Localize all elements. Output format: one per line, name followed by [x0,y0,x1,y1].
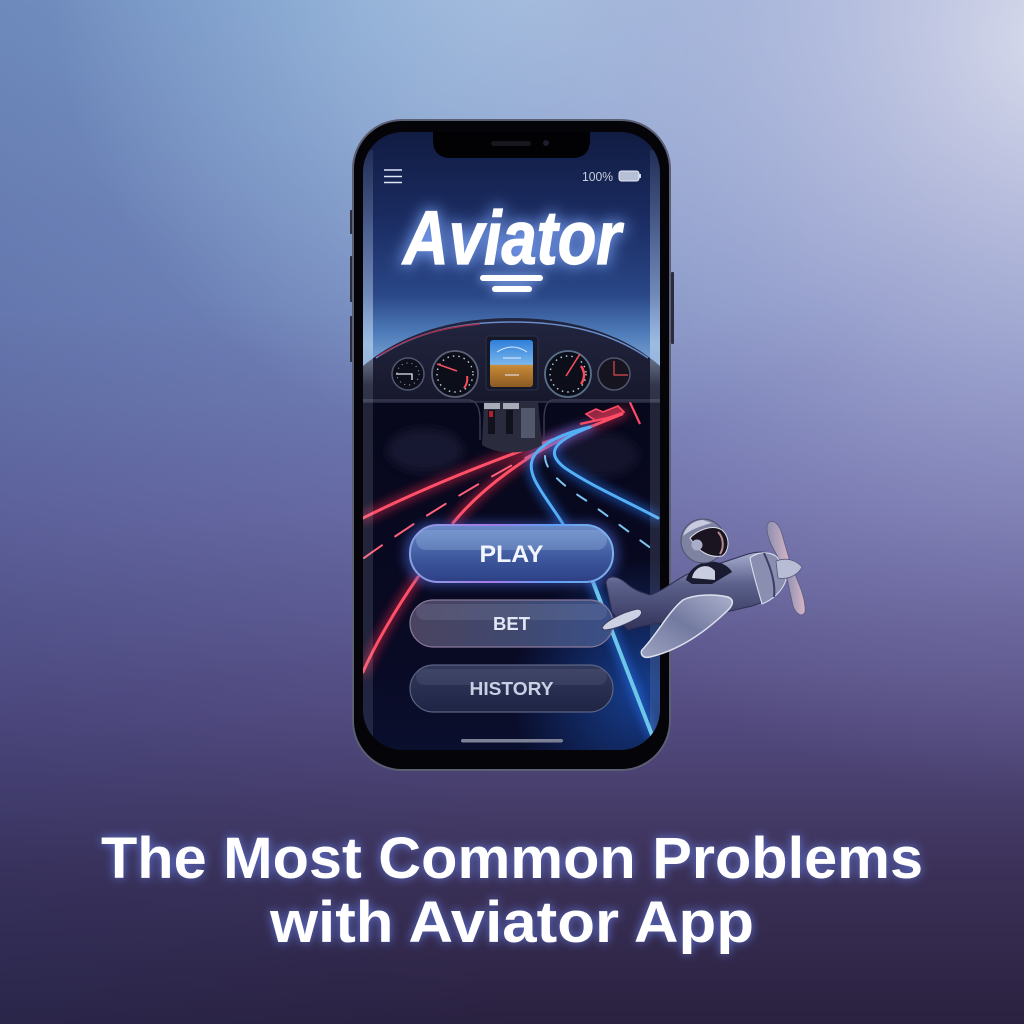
gauge far left [392,358,424,390]
PLAY button: PLAY [480,541,544,568]
gauge far right [598,358,630,390]
title: with Aviator App [269,890,754,955]
attitude indicator display [486,336,538,390]
throttle levers [482,402,542,452]
phone screen [363,132,660,752]
battery status [582,170,641,184]
road: blue neon lines [531,427,660,735]
phone body [352,119,671,771]
title: with Aviator App [269,890,754,955]
menu icon [384,170,402,182]
BET button: BET [493,614,530,634]
smartphone [350,119,674,771]
screen lower road background [363,370,660,752]
Aviator logo: Aviator [401,196,625,281]
logo underline bars [480,275,543,292]
airplane with pilot [602,519,805,657]
HISTORY button [410,665,613,712]
main wing [641,595,732,657]
gauge right [545,351,591,397]
side buttons [350,210,674,362]
tail plane [602,609,642,630]
pilot body in cockpit [686,562,732,584]
BET button [410,600,613,647]
Aviator logo: Aviator [401,196,625,281]
screen sky [363,132,660,372]
propeller [767,521,805,615]
notch [433,132,590,158]
gauge left [432,351,478,397]
PLAY button [404,522,619,586]
battery status: 100% [582,170,613,184]
title: The Most Common Problems [101,826,923,891]
road: red neon lines [363,412,625,672]
HISTORY button: HISTORY [470,679,554,699]
fuselage and tail [606,552,784,630]
pilot helmet [681,519,728,563]
title: The Most Common Problems [101,826,923,891]
neon red plane on the road [580,402,641,426]
home indicator [461,739,563,742]
title [101,826,923,955]
propeller hub [776,559,802,578]
cockpit dashboard [363,318,660,452]
glass side reflections [363,150,660,740]
engine cowl [750,553,786,604]
